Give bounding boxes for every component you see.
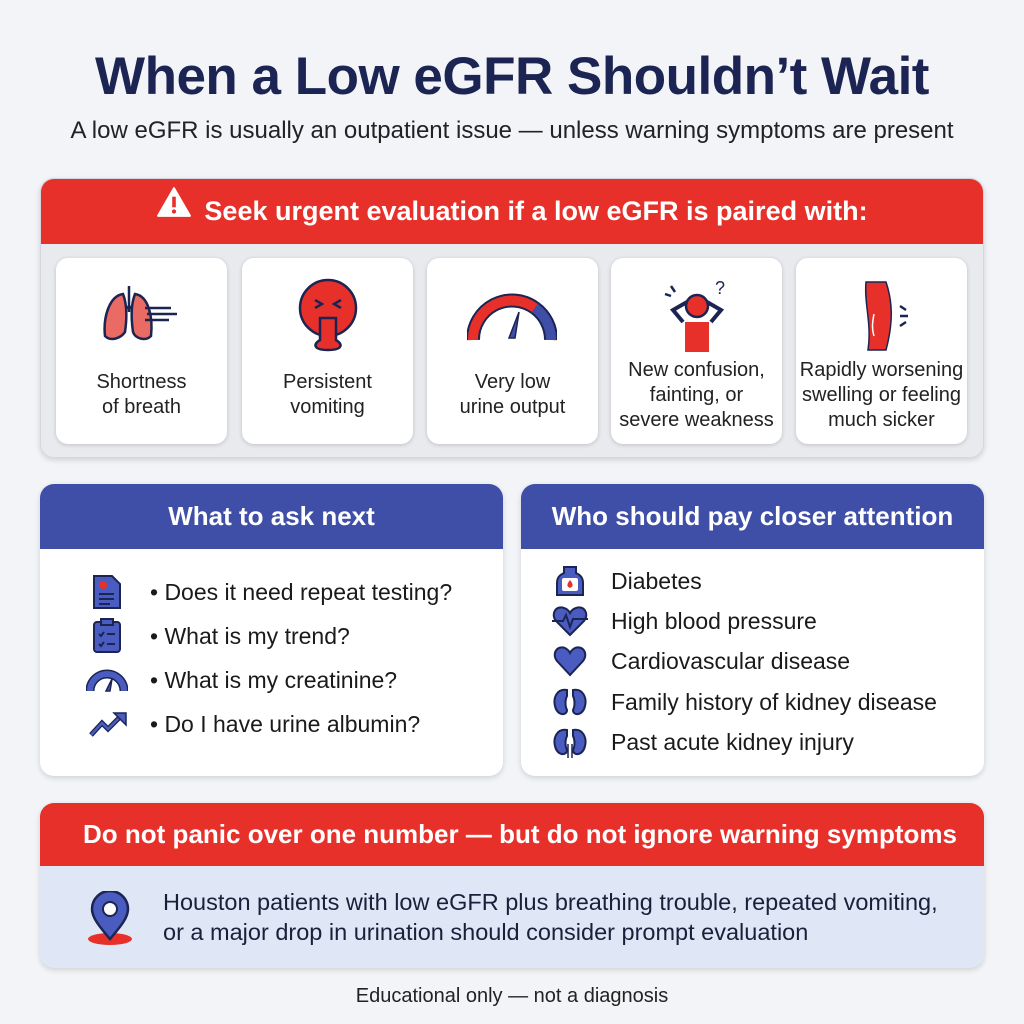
panel: who should pay closer attention: Family history of kidney disease xyxy=(611,688,937,714)
panel: bottom message xyxy=(40,803,984,968)
card: shortness of breath: Shortness xyxy=(96,371,187,393)
panel: what to ask next: • Do I have urine albumin? xyxy=(150,710,420,736)
heading: do not panic xyxy=(40,803,984,866)
risk list xyxy=(552,566,937,758)
panel: what to ask next xyxy=(40,484,503,776)
card: persistent vomiting xyxy=(242,258,413,444)
card: low urine output xyxy=(427,258,598,444)
panel: what to ask next: • Does it need repeat testing? xyxy=(150,578,452,604)
title: When a Low eGFR Shouldn’t Wait xyxy=(95,47,929,106)
card: swelling: Rapidly worsening xyxy=(800,359,963,381)
heading: urgent: Seek urgent evaluation if a low eGFR is paired with: xyxy=(204,196,868,226)
heading: what to ask: What to ask next xyxy=(168,501,375,531)
card: confusion: New confusion, xyxy=(628,359,765,381)
card: swelling: swelling or feeling xyxy=(802,384,961,406)
card: shortness of breath xyxy=(56,258,227,444)
heading: what to ask xyxy=(40,484,503,549)
card: low urine output: urine output xyxy=(460,396,565,418)
card: low urine output: Very low xyxy=(475,371,550,393)
text: Houston patients xyxy=(163,889,938,945)
panel: who should pay closer attention: Cardiovascular disease xyxy=(611,648,850,674)
panel: who should pay closer attention: Diabetes xyxy=(611,568,702,594)
panel: what to ask next: • What is my trend? xyxy=(150,622,350,648)
heading: who: Who should pay closer attention xyxy=(552,501,953,531)
text: Houston patients: or a major drop in urination should consider prompt evaluation xyxy=(163,919,808,945)
heading: urgent xyxy=(41,179,983,244)
heading: do not panic: Do not panic over one number — but do not ignore warning symptoms xyxy=(83,819,957,849)
icon: location pin xyxy=(88,891,132,945)
text: Houston patients: Houston patients with low eGFR plus breathing trouble, repeated vomiting, xyxy=(163,889,938,915)
subtitle: A low eGFR is usually an outpatient issue — unless warning symptoms are present xyxy=(70,117,954,144)
panel: who should pay closer attention xyxy=(521,484,984,776)
card: persistent vomiting: Persistent xyxy=(283,371,372,393)
footer: Educational only — not a diagnosis xyxy=(356,985,668,1007)
panel: what to ask next: • What is my creatinine? xyxy=(150,666,397,692)
card: confusion: fainting, or xyxy=(650,384,743,406)
panel: urgent symptoms xyxy=(40,178,984,458)
panel: who should pay closer attention: Past acute kidney injury xyxy=(611,728,854,754)
card: confusion xyxy=(611,258,782,444)
panel: who should pay closer attention: High blood pressure xyxy=(611,608,817,634)
card: swelling xyxy=(796,258,967,444)
card: persistent vomiting: vomiting xyxy=(290,396,365,418)
card: shortness of breath: of breath xyxy=(102,396,181,418)
heading: who xyxy=(521,484,984,549)
card: confusion: severe weakness xyxy=(619,409,774,431)
question list xyxy=(86,575,452,737)
card: swelling: much sicker xyxy=(828,409,935,431)
